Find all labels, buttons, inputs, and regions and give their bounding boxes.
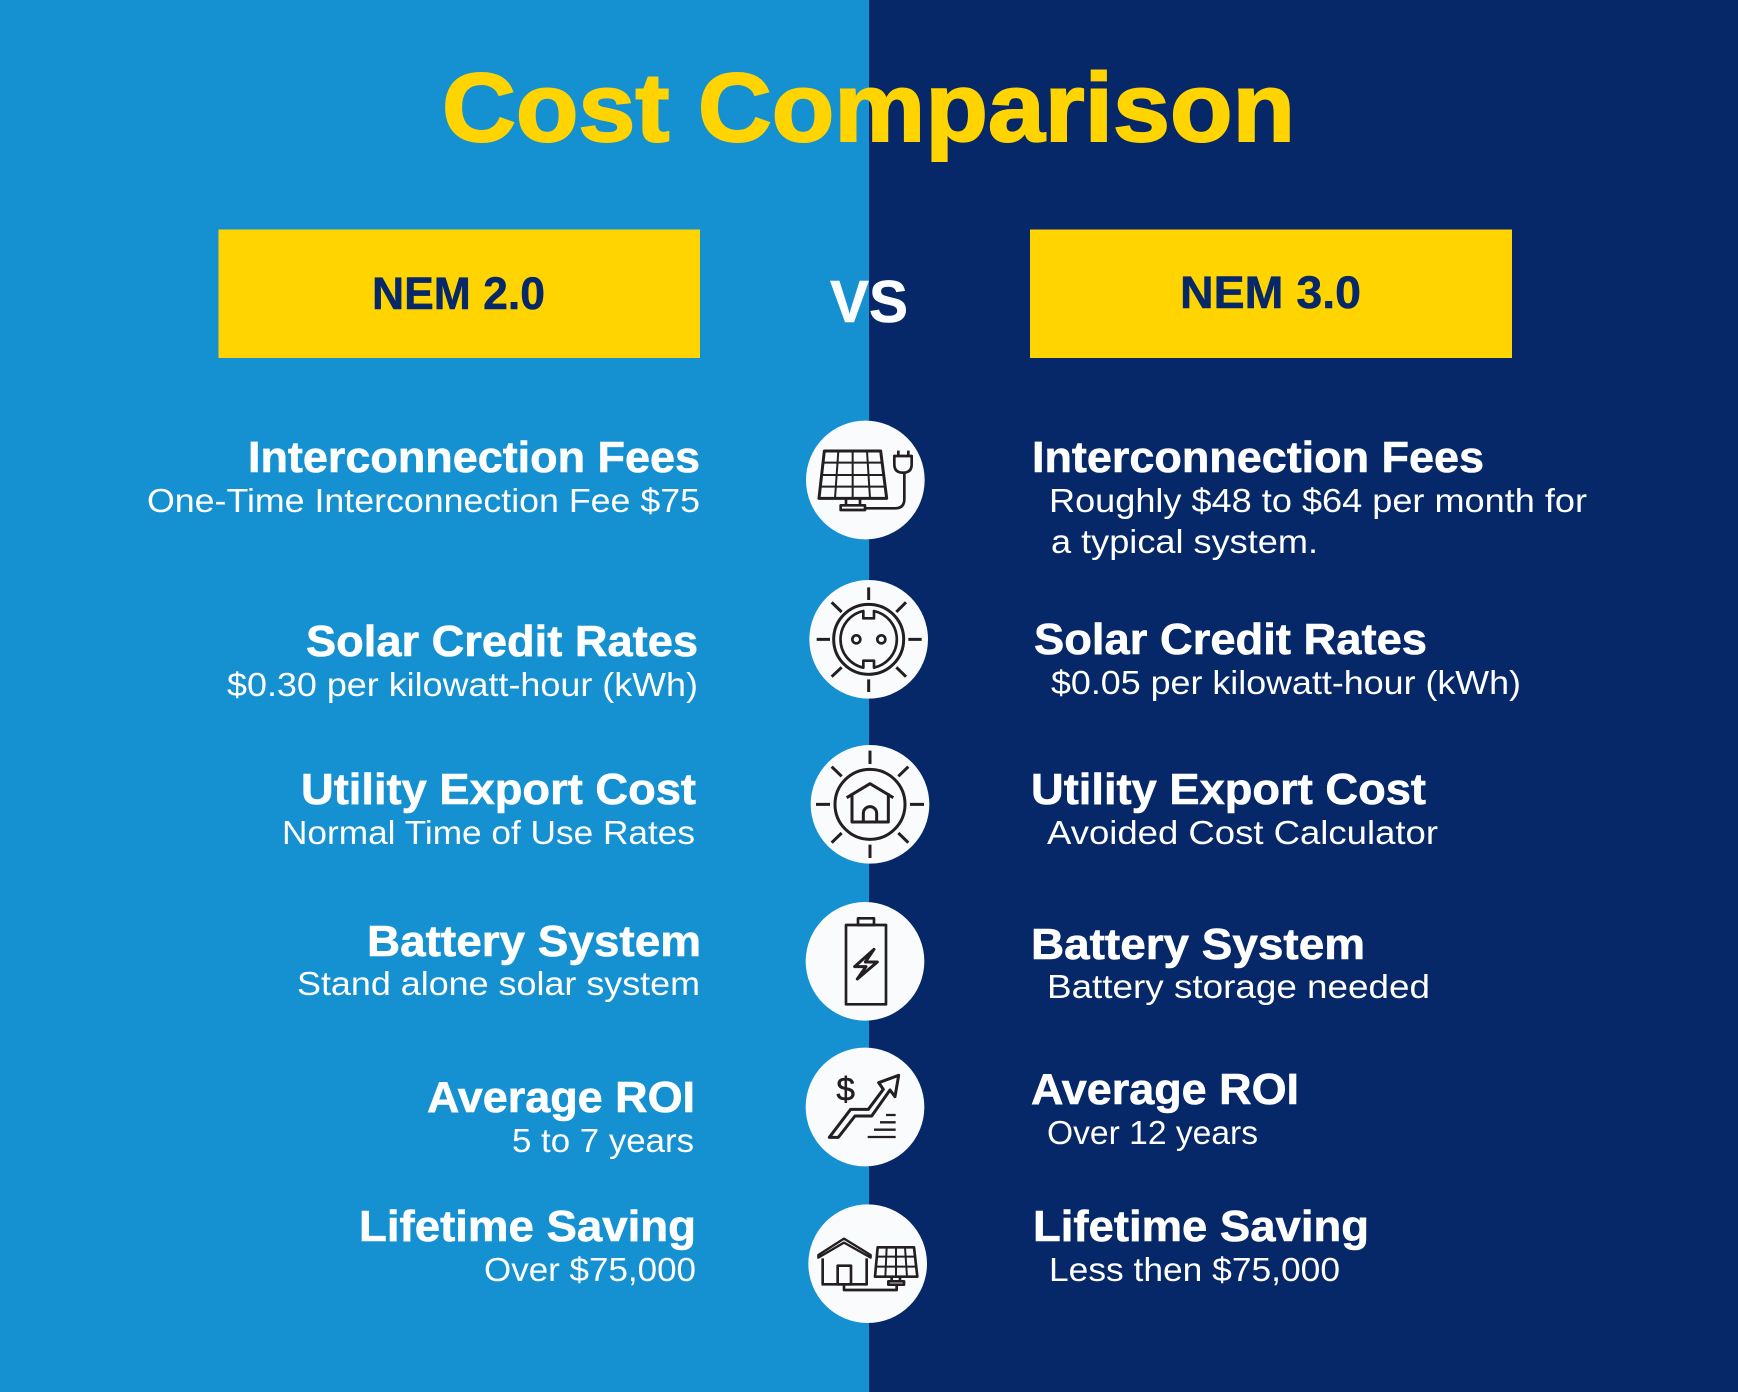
right text: Utility Export Cost: Avoided Cost Calculator	[1047, 814, 1438, 851]
right text: Average ROI	[1031, 1066, 1299, 1151]
title: Cost Comparison	[442, 53, 1295, 162]
left text: Battery System: Stand alone solar system	[297, 965, 700, 1002]
panel: left background NEM 2.0	[0, 0, 869, 1392]
icon: rising arrow with dollar sign	[806, 1048, 924, 1166]
right text: Interconnection Fees: a typical system.	[1051, 523, 1318, 560]
left text: Average ROI: Average ROI	[427, 1074, 695, 1122]
right text: Interconnection Fees: Interconnection Fees	[1032, 434, 1484, 482]
header box: NEM 3.0	[1030, 230, 1512, 358]
icon: rising arrow with dollar sign: $	[836, 1072, 855, 1109]
left text: Average ROI: 5 to 7 years	[512, 1122, 694, 1159]
right text: Lifetime Saving	[1033, 1203, 1369, 1288]
header box: NEM 2.0: NEM 2.0	[372, 268, 545, 319]
right text: Battery System	[1031, 921, 1430, 1005]
icon: house connected to solar panel	[808, 1204, 927, 1323]
left text: Interconnection Fees	[147, 434, 700, 519]
left text: Battery System: Battery System	[367, 918, 701, 966]
right text: Interconnection Fees: Roughly $48 to $64 per month for	[1049, 482, 1587, 519]
right text: Battery System: Battery storage needed	[1047, 968, 1430, 1005]
panel: right background NEM 3.0	[869, 0, 1738, 1392]
left text: Solar Credit Rates: Solar Credit Rates	[306, 618, 698, 666]
left text: Interconnection Fees: Interconnection Fees	[248, 434, 700, 482]
right text: Utility Export Cost	[1031, 766, 1438, 851]
left text: Utility Export Cost: Normal Time of Use Rates	[282, 814, 695, 851]
left text: Solar Credit Rates: $0.30 per kilowatt-hour (kWh)	[227, 666, 698, 703]
right text: Lifetime Saving: Lifetime Saving	[1033, 1203, 1369, 1251]
right text: Average ROI: Average ROI	[1031, 1066, 1299, 1114]
left text: Average ROI	[427, 1074, 695, 1159]
right text: Average ROI: Over 12 years	[1047, 1114, 1258, 1151]
icon: battery with lightning bolt	[806, 902, 924, 1021]
left text: Lifetime Saving: Lifetime Saving	[359, 1203, 696, 1251]
right text: Solar Credit Rates	[1034, 616, 1521, 701]
left text: Interconnection Fees: One-Time Interconnection Fee $75	[147, 482, 700, 519]
icon: solar panel with plug	[806, 421, 925, 539]
right text: Utility Export Cost: Utility Export Cost	[1031, 766, 1426, 814]
left text: Utility Export Cost: Utility Export Cost	[301, 766, 696, 814]
left text: Lifetime Saving	[359, 1203, 696, 1288]
left text: Utility Export Cost	[282, 766, 696, 851]
header box: NEM 2.0	[218, 230, 700, 358]
right text: Interconnection Fees	[1032, 434, 1587, 560]
header box: NEM 3.0: NEM 3.0	[1180, 267, 1361, 318]
left text: Lifetime Saving: Over $75,000	[484, 1251, 696, 1288]
icon: power socket with rays	[809, 580, 928, 699]
right text: Battery System: Battery System	[1031, 921, 1365, 969]
left text: Solar Credit Rates	[227, 618, 698, 703]
left text: Battery System	[297, 918, 701, 1002]
right text: Solar Credit Rates: $0.05 per kilowatt-hour (kWh)	[1051, 664, 1521, 701]
icon: house with sun rays	[811, 745, 929, 864]
right text: Lifetime Saving: Less then $75,000	[1049, 1251, 1340, 1288]
vs label: VS	[830, 269, 908, 335]
right text: Solar Credit Rates: Solar Credit Rates	[1034, 616, 1427, 664]
